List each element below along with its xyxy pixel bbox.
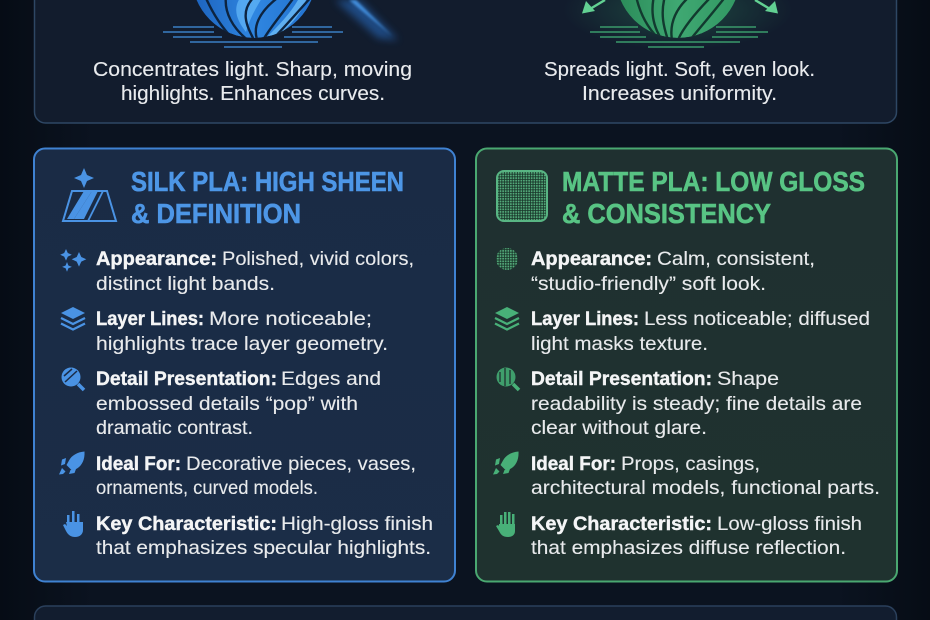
panel: matte PLA [476,148,897,582]
item: key characteristic: Key Characteristic: [96,513,277,535]
item: layer lines: Less noticeable; diffused [644,308,870,330]
item: layer lines [96,308,388,355]
item: layer lines [531,308,870,355]
item: ideal for: Decorative pieces, vases, [186,453,416,475]
icon: right diffuse arrow [755,0,778,14]
item: ideal for: ornaments, curved models. [96,477,318,499]
item: detail presentation: dramatic contrast. [96,417,253,439]
item: detail presentation: Detail Presentation: [96,368,277,390]
item: appearance: Appearance: [96,248,217,270]
heading: silk PLA [131,166,404,229]
item: ideal for: Ideal For: [531,453,616,475]
item: detail presentation: Detail Presentation: [531,368,712,390]
icon: hand [496,512,515,537]
item: ideal for: Ideal For: [96,453,181,475]
item: detail presentation: clear without glare. [531,417,707,439]
caption: glossy light behaviour [93,59,412,105]
icon: rocket [59,452,85,474]
panel: silk PLA [34,148,455,582]
icon: layers [495,307,519,330]
item: detail presentation: Edges and [281,368,381,390]
item: appearance [96,248,414,295]
caption: matte light behaviour: Increases uniformity. [582,83,777,105]
caption: glossy light behaviour: Concentrates light. Sharp, moving [93,59,412,81]
item: layer lines: Layer Lines: [96,308,204,330]
icon: rocket [493,452,519,474]
item: detail presentation: Shape [717,368,779,390]
item: key characteristic [531,513,862,559]
item: appearance: distinct light bands. [96,273,275,295]
icon: glossy blue sphere [163,0,398,47]
icon: hand [63,511,83,537]
item: appearance: Calm, consistent, [657,248,815,270]
caption: matte light behaviour [544,59,815,105]
item: layer lines: Layer Lines: [531,308,639,330]
item: appearance: Polished, vivid colors, [222,248,414,270]
icon: sparkles [60,249,86,272]
item: layer lines: highlights trace layer geometry. [96,333,388,355]
icon: left diffuse arrow [582,0,605,14]
item: ideal for [531,453,880,499]
item: key characteristic: Key Characteristic: [531,513,712,535]
icon: matte texture swatch [497,171,547,221]
item: appearance: “studio-friendly” soft look. [531,273,766,295]
item: detail presentation: embossed details “pop” with [96,393,358,415]
caption: glossy light behaviour: highlights. Enhances curves. [121,83,385,105]
heading: matte PLA [562,166,865,229]
item: key characteristic: High-gloss finish [281,513,433,535]
item: layer lines: More noticeable; [209,308,372,330]
heading: silk PLA: SILK PLA: HIGH SHEEN [131,166,404,197]
item: ideal for: Props, casings, [621,453,760,475]
heading: matte PLA: MATTE PLA: LOW GLOSS [562,166,865,197]
icon: dotted circle [496,248,518,270]
item: key characteristic: that emphasizes diffuse reflection. [531,537,846,559]
icon: detail magnifier [62,368,84,390]
icon: detail magnifier [496,368,519,390]
icon: matte green sphere [582,0,778,48]
heading: matte PLA: & CONSISTENCY [562,198,771,229]
panel: bottom section [34,606,896,620]
item: appearance: Appearance: [531,248,652,270]
item: detail presentation [531,368,862,439]
icon: layers [61,307,85,330]
item: ideal for [96,453,416,499]
item: key characteristic [96,513,433,559]
item: layer lines: light masks texture. [531,333,708,355]
item: appearance [531,248,815,295]
caption: matte light behaviour: Spreads light. Soft, even look. [544,59,815,81]
item: ideal for: architectural models, functional parts. [531,477,880,499]
item: key characteristic: Low-gloss finish [717,513,862,535]
item: detail presentation: readability is steady; fine details are [531,393,862,415]
item: key characteristic: that emphasizes specular highlights. [96,537,431,559]
icon: silk sheen surface [63,168,116,221]
heading: silk PLA: & DEFINITION [131,198,301,229]
item: detail presentation [96,368,381,439]
